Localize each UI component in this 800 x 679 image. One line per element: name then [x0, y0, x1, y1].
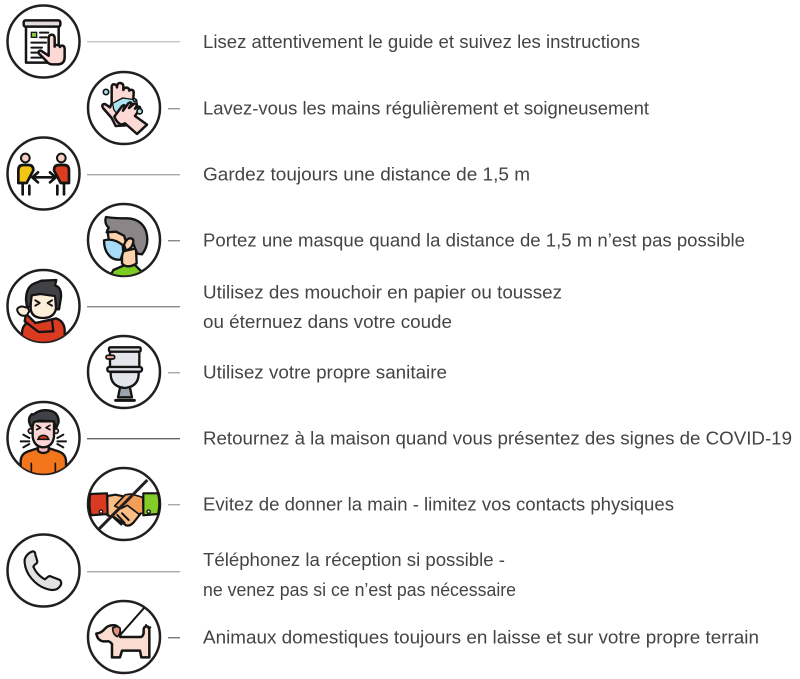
connector line [168, 108, 180, 109]
icon: crossed-out handshake [89, 480, 159, 529]
row 1: read the guide [8, 6, 640, 78]
icon: sick man [21, 410, 66, 475]
instruction text [203, 282, 562, 332]
row 2: wash hands [88, 72, 649, 144]
instruction text: Gardez toujours une distance de 1,5 m [203, 164, 530, 184]
row 9: phone reception [8, 534, 516, 606]
icon: toilet [106, 347, 142, 400]
row 4: wear mask [88, 204, 745, 278]
row 6: own toilet [88, 336, 447, 408]
row 5: sneeze into elbow [8, 270, 562, 343]
instruction text: ne venez pas si ce n’est pas nécessaire [203, 580, 516, 600]
connector line [87, 306, 180, 307]
connector line [168, 240, 180, 241]
row 3: keep distance [8, 138, 530, 210]
connector line [87, 174, 180, 175]
icon circle [88, 601, 160, 673]
row 10: pets on leash [88, 601, 759, 673]
connector line [87, 571, 180, 572]
connector line [168, 637, 180, 638]
instruction text: Animaux domestiques toujours en laisse et sur votre propre terrain [203, 628, 759, 648]
instruction text: Lisez attentivement le guide et suivez les instructions [203, 32, 640, 52]
instruction text [203, 550, 516, 600]
instruction text: Portez une masque quand la distance de 1,5 m n’est pas possible [203, 230, 745, 250]
icon: telephone handset [25, 551, 61, 590]
connector line [87, 438, 180, 439]
icon circle [88, 468, 160, 540]
icon: two people with arrow [18, 154, 69, 194]
icon circle [8, 6, 80, 78]
instruction text: Utilisez des mouchoir en papier ou toussez [203, 282, 562, 302]
icon: man wearing mask [104, 217, 147, 278]
icon: document with pointing hand [24, 20, 65, 64]
instruction text: ou éternuez dans votre coude [203, 312, 452, 332]
icon: washing hands [102, 83, 147, 134]
icon circle [8, 534, 80, 606]
instruction text: Utilisez votre propre sanitaire [203, 362, 447, 382]
icon circle [88, 204, 160, 276]
icon: dog on leash [96, 608, 151, 657]
instruction text: Evitez de donner la main - limitez vos contacts physiques [203, 494, 674, 514]
row 7: go home if symptomatic [8, 402, 792, 475]
icon circle [8, 270, 80, 342]
instruction text: Téléphonez la réception si possible - [203, 550, 505, 570]
connector line [87, 41, 180, 42]
instruction text: Lavez-vous les mains régulièrement et soigneusement [203, 98, 649, 118]
row 8: no handshake [88, 468, 674, 540]
icon circle [8, 402, 80, 474]
icon circle [88, 72, 160, 144]
connector line [168, 372, 180, 373]
connector line [168, 504, 180, 505]
instruction text: Retournez à la maison quand vous présentez des signes de COVID-19 [203, 428, 792, 448]
icon circle [8, 138, 80, 210]
icon circle [88, 336, 160, 408]
icon: man sneezing into elbow [17, 280, 65, 343]
